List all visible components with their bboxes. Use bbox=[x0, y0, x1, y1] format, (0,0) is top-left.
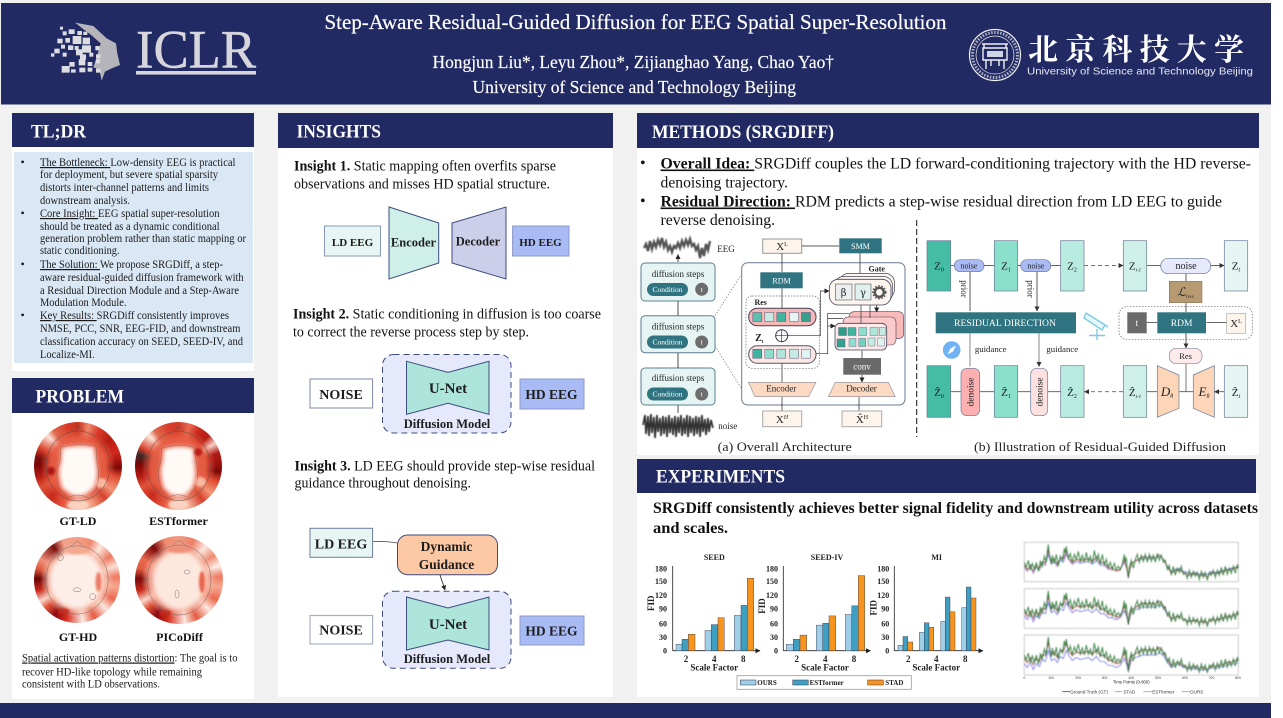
bar chart: SEED-IV: 0 bbox=[774, 646, 778, 656]
diagram: dynamic guidance: Guidance bbox=[419, 557, 474, 572]
bar chart: MI: 30 bbox=[881, 633, 889, 642]
block: diffusion steps stack: Condition bbox=[652, 338, 683, 346]
summary text block: downstream analysis. bbox=[40, 193, 130, 207]
summary text block: The Solution: We propose SRGDiff, a step- bbox=[40, 257, 223, 271]
diagram (b): residual-guided diffusion bbox=[927, 241, 1252, 454]
bar chart legend bbox=[737, 676, 911, 689]
diagram: static conditioning: HD EEG bbox=[525, 387, 578, 402]
key finding text: and scales. bbox=[653, 520, 728, 537]
bar chart: SEED-IV: 90 bbox=[770, 604, 778, 614]
heading: METHODS: METHODS (SRGDIFF) bbox=[652, 122, 834, 143]
block: diffusion steps stack: t bbox=[701, 338, 704, 347]
RDM bbox=[760, 272, 803, 288]
bar chart: MI: 60 bbox=[881, 620, 889, 628]
block: diffusion steps stack: t bbox=[701, 285, 704, 294]
reverse trajectory: denoise bbox=[1036, 377, 1046, 407]
module detail box: Res bbox=[754, 298, 767, 307]
panel: EXPERIMENTS bbox=[637, 459, 1259, 697]
axis labels: 700 bbox=[1209, 676, 1214, 680]
methods bullets: Overall Idea: SRGDiff couples the LD forward-conditioning trajectory with the HD reverse- bbox=[660, 156, 1251, 172]
bar chart: MI: 0 bbox=[885, 646, 889, 656]
RDM block: Res bbox=[1179, 351, 1192, 361]
bar chart: MI: 90 bbox=[881, 604, 889, 614]
module detail box bbox=[742, 238, 905, 427]
bar chart: MI: 180 bbox=[877, 564, 889, 574]
module detail box: X bbox=[776, 241, 784, 253]
bar chart: SEED: 0 bbox=[663, 646, 667, 656]
block: diffusion steps stack: diffusion steps bbox=[652, 322, 705, 332]
bar chart: SEED-IV: 150 bbox=[766, 577, 778, 586]
module detail box: X bbox=[776, 414, 784, 426]
reverse trajectory: Ẑ bbox=[1129, 387, 1136, 399]
forward trajectory: Z bbox=[1001, 260, 1008, 272]
bar chart: SEED: Scale Factor bbox=[690, 662, 738, 672]
authors: Hongjun Liu*, Leyu Zhou*, Zijianghao Yang, Chao Yao† bbox=[432, 52, 834, 72]
diagram: static conditioning: Diffusion Model bbox=[404, 417, 491, 431]
bar chart: SEED: 60 bbox=[659, 620, 667, 628]
axis labels: 100 bbox=[1048, 676, 1054, 680]
prior arrows bbox=[959, 272, 1037, 311]
diagram: static conditioning bbox=[310, 354, 584, 433]
reverse trajectory: t bbox=[1239, 394, 1241, 400]
topomap labels: GT-LD bbox=[60, 514, 97, 528]
module detail box: H bbox=[783, 415, 789, 421]
heading: PROBLEM: PROBLEM bbox=[36, 386, 124, 408]
bar chart: SEED-IV: 30 bbox=[770, 633, 778, 642]
axis labels: Time Points (0-800) bbox=[1113, 680, 1150, 684]
insight 3 text: guidance throughout denoising. bbox=[294, 476, 471, 492]
icon: telescope bbox=[1084, 313, 1108, 340]
forward trajectory: 0 bbox=[941, 268, 944, 274]
insight 1 text: observations and misses HD spatial structure. bbox=[294, 176, 550, 192]
axis labels bbox=[1023, 676, 1241, 684]
block: diffusion steps stack bbox=[641, 254, 715, 413]
forward trajectory: noise bbox=[1028, 262, 1045, 270]
heading: TL;DR: TL;DR bbox=[31, 122, 86, 142]
line chart legend: OURS bbox=[1190, 689, 1203, 694]
forward trajectory: 1 bbox=[1008, 268, 1011, 274]
module detail box: X̂ bbox=[856, 414, 864, 426]
bar chart: SEED-IV: 180 bbox=[766, 564, 778, 574]
summary text block: Modulation Module. bbox=[40, 295, 126, 309]
forward trajectory: t-1 bbox=[1136, 268, 1141, 274]
methods bullets: Residual Direction: RDM predicts a step-wise residual direction from LD EEG to guide bbox=[660, 194, 1222, 210]
bar chart: SEED: 2 bbox=[684, 654, 689, 664]
guidance arrows: guidance bbox=[1046, 344, 1078, 354]
module detail box: γ bbox=[860, 288, 866, 299]
bar chart: MI: 120 bbox=[877, 591, 889, 600]
bar chart: SEED-IV: SEED-IV bbox=[811, 553, 843, 562]
module detail box: RDM bbox=[772, 276, 791, 285]
label: noise: noise bbox=[718, 421, 737, 431]
diagram: static mapping: HD EEG bbox=[519, 237, 562, 249]
input XL bbox=[763, 239, 802, 253]
key finding text bbox=[653, 500, 1258, 537]
diagram: dynamic guidance: Dynamic bbox=[421, 539, 472, 554]
heading: EXPERIMENTS: EXPERIMENTS bbox=[656, 466, 785, 488]
forward trajectory: Z bbox=[934, 260, 941, 272]
RDM block: X bbox=[1230, 318, 1238, 330]
reverse trajectory: Ẑ bbox=[1001, 387, 1008, 399]
summary text block: Core Insight: EEG spatial super-resolution bbox=[40, 206, 220, 220]
module detail box: Z bbox=[755, 333, 762, 344]
bar chart legend: ESTformer bbox=[810, 679, 844, 687]
divider bbox=[916, 220, 918, 437]
forward trajectory: noise bbox=[1175, 261, 1197, 272]
reverse trajectory: 0 bbox=[941, 394, 944, 400]
summary text block: for deployment, but severe spatial sparsity bbox=[40, 167, 218, 181]
diagram: static mapping bbox=[324, 207, 569, 279]
icon: compass bbox=[943, 341, 960, 359]
reverse trajectory: θ bbox=[1206, 394, 1210, 400]
forward trajectory bbox=[927, 241, 1248, 291]
problem caption bbox=[22, 650, 238, 690]
insight 2 text bbox=[293, 306, 601, 340]
insight 2 text: to correct the reverse process step by step. bbox=[293, 324, 529, 340]
insight 1 text bbox=[294, 158, 556, 192]
diagram (a): overall architecture bbox=[641, 238, 905, 454]
prior arrows: prior bbox=[1026, 280, 1036, 298]
diagram: dynamic guidance: LD EEG bbox=[315, 538, 367, 552]
axis labels: 200 bbox=[1075, 676, 1081, 680]
icon: EEG wave bbox=[644, 238, 710, 258]
caption (a): (a) Overall Architecture bbox=[718, 439, 852, 454]
summary text block: NMSE, PCC, SNR, EEG-FID, and downstream bbox=[40, 321, 241, 335]
module detail box: Encoder bbox=[766, 384, 796, 394]
bar chart: SEED bbox=[646, 553, 760, 672]
bar chart: SEED: SEED bbox=[704, 553, 725, 562]
logo: USTB wordmark: University of Science and Technology Beijing bbox=[1027, 66, 1253, 78]
bar chart: SEED-IV: Scale Factor bbox=[801, 662, 849, 672]
methods bullets: • bbox=[640, 193, 646, 210]
summary text block: generation problem rather than static mapping or bbox=[40, 231, 246, 245]
insight 1 text: Insight 1. Static mapping often overfits sparse bbox=[294, 158, 556, 174]
RDM block: res bbox=[1186, 294, 1194, 300]
summary text block: Localize-MI. bbox=[40, 347, 95, 361]
diagram: dynamic guidance: NOISE bbox=[319, 624, 363, 638]
module detail box: t bbox=[762, 340, 764, 345]
encoder / decoder bbox=[748, 382, 816, 397]
bar chart: SEED: 150 bbox=[655, 577, 667, 586]
logo: ICLR bbox=[51, 20, 256, 81]
block: diffusion steps stack: Condition bbox=[652, 285, 683, 294]
summary text block: • bbox=[20, 257, 25, 271]
prior arrows: prior bbox=[959, 280, 969, 298]
bar chart: SEED-IV: 4 bbox=[823, 654, 828, 664]
block: diffusion steps stack: Condition bbox=[652, 390, 683, 398]
line chart legend: STAD bbox=[1123, 689, 1136, 694]
caption (b): (b) Illustration of Residual-Guided Diffusion bbox=[974, 439, 1227, 454]
problem caption: Spatial activation patterns distortion: The goal is to bbox=[22, 650, 238, 664]
guidance arrows bbox=[970, 333, 1078, 366]
bar chart: SEED: FID bbox=[646, 595, 656, 611]
summary text block bbox=[14, 152, 253, 363]
axis labels: 300 bbox=[1102, 676, 1107, 680]
summary text block: classification accuracy on SEED, SEED-IV, and bbox=[40, 334, 243, 348]
RDM block: L bbox=[1238, 319, 1242, 325]
diagram: static mapping: Decoder bbox=[456, 234, 501, 248]
bar chart: MI bbox=[868, 553, 983, 672]
axis labels: 0 bbox=[1023, 676, 1025, 680]
line chart legend: Ground Truth (GT) bbox=[1070, 689, 1108, 694]
bar chart: MI: FID bbox=[868, 599, 878, 615]
reverse trajectory: Ẑ bbox=[1232, 387, 1239, 399]
methods bullets: • bbox=[640, 155, 646, 172]
panel: METHODS bbox=[637, 113, 1259, 455]
summary text block: should be treated as a dynamic conditional bbox=[40, 219, 220, 233]
module detail box: SMM bbox=[851, 242, 870, 251]
bar chart: MI: MI bbox=[931, 553, 942, 562]
bar chart: SEED-IV bbox=[757, 553, 870, 672]
axis labels: 600 bbox=[1182, 676, 1188, 680]
problem caption: recover HD-like topology while remaining bbox=[22, 664, 202, 678]
topomap labels: PICoDiff bbox=[156, 630, 204, 644]
forward trajectory: 2 bbox=[1074, 268, 1077, 274]
summary text block: The Bottleneck: Low-density EEG is practical bbox=[40, 155, 236, 169]
bar chart: SEED: 30 bbox=[659, 633, 667, 642]
residual direction bar bbox=[936, 312, 1076, 333]
bar chart: MI: 8 bbox=[963, 654, 968, 664]
bar chart: SEED-IV: 60 bbox=[770, 620, 778, 628]
RDM block: t bbox=[1136, 319, 1139, 329]
bar chart legend: OURS bbox=[757, 679, 777, 687]
label: EEG: EEG bbox=[717, 244, 735, 254]
icon: noise wave bbox=[643, 414, 713, 438]
reverse trajectory: θ bbox=[1170, 394, 1173, 400]
forward trajectory: Z bbox=[1067, 260, 1074, 272]
footer bar bbox=[0, 703, 1271, 718]
reverse trajectory: 1 bbox=[1008, 394, 1011, 400]
bar chart: SEED: 90 bbox=[659, 604, 667, 614]
SMM bbox=[839, 238, 882, 253]
block: diffusion steps stack: t bbox=[701, 390, 704, 399]
heading: INSIGHTS: INSIGHTS bbox=[296, 122, 381, 142]
module detail box: L bbox=[784, 242, 788, 248]
RDM block: ℒ bbox=[1177, 285, 1186, 299]
residual direction bar: RESIDUAL DIRECTION bbox=[954, 319, 1056, 329]
topomap: PICoDiff bbox=[135, 536, 223, 624]
bar chart: SEED-IV: 120 bbox=[766, 591, 778, 600]
feature maps bbox=[849, 312, 904, 339]
insight 3 text: Insight 3. LD EEG should provide step-wise residual bbox=[294, 458, 595, 474]
forward trajectory: Z bbox=[1232, 260, 1239, 272]
reverse trajectory: D bbox=[1161, 384, 1170, 399]
summary text block: static conditioning. bbox=[40, 243, 120, 257]
methods bullets: reverse denoising. bbox=[660, 212, 775, 229]
axis labels: 400 bbox=[1128, 676, 1134, 680]
key finding text: SRGDiff consistently achieves better signal fidelity and downstream utility across datasets bbox=[653, 500, 1258, 517]
bar chart: MI: Scale Factor bbox=[912, 662, 960, 672]
logo: USTB seal bbox=[970, 30, 1020, 80]
block: diffusion steps stack: diffusion steps bbox=[652, 269, 705, 279]
methods bullets: denoising trajectory. bbox=[660, 174, 788, 192]
insight 3 text bbox=[294, 458, 595, 492]
gate: Gate bbox=[868, 264, 885, 274]
bar chart: SEED-IV: 2 bbox=[794, 654, 799, 664]
line chart legend bbox=[1062, 689, 1203, 694]
block: diffusion steps stack: diffusion steps bbox=[652, 373, 705, 383]
reverse trajectory: t-1 bbox=[1136, 395, 1141, 400]
diagram: static conditioning: U-Net bbox=[429, 381, 467, 397]
summary text block: • bbox=[20, 206, 25, 220]
affiliation: University of Science and Technology Beijing bbox=[472, 77, 796, 97]
RDM block: RDM bbox=[1171, 319, 1193, 329]
module detail box: β bbox=[841, 288, 847, 299]
bar chart: SEED-IV: FID bbox=[757, 598, 767, 614]
panel: PROBLEM bbox=[12, 378, 254, 699]
bar chart: SEED: 4 bbox=[712, 654, 717, 664]
line chart legend: ESTformer bbox=[1152, 689, 1175, 694]
insight 2 text: Insight 2. Static conditioning in diffusion is too coarse bbox=[293, 306, 601, 322]
diagram: static mapping: LD EEG bbox=[332, 237, 374, 249]
methods bullets bbox=[640, 155, 1251, 229]
forward trajectory: Z bbox=[1129, 260, 1136, 272]
dotted zoom lines bbox=[715, 275, 741, 388]
summary text block: • bbox=[20, 155, 25, 169]
forward trajectory: t bbox=[1239, 268, 1241, 274]
module detail box: H bbox=[864, 415, 869, 421]
input / output bbox=[763, 411, 802, 427]
diagram: static mapping: Encoder bbox=[391, 236, 437, 250]
summary text block: aware residual-guided diffusion framework with bbox=[40, 270, 244, 284]
topomap: GT-HD bbox=[34, 537, 120, 623]
topomap labels: GT-HD bbox=[59, 630, 97, 644]
bar chart: SEED: 180 bbox=[655, 564, 667, 574]
residual group bbox=[746, 296, 819, 368]
guidance arrows: guidance bbox=[975, 344, 1007, 354]
logo: USTB wordmark: 北京科技大学 bbox=[1028, 25, 1253, 69]
RDM block bbox=[1119, 274, 1252, 364]
axis labels: 500 bbox=[1155, 676, 1161, 680]
panel: INSIGHTS bbox=[278, 113, 613, 697]
topomap: ESTformer bbox=[134, 422, 222, 510]
reverse trajectory: 2 bbox=[1074, 394, 1077, 400]
bar chart: SEED: 120 bbox=[655, 591, 667, 600]
reverse trajectory: Ẑ bbox=[1067, 387, 1074, 399]
module detail box: conv bbox=[853, 362, 871, 372]
summary text block: • bbox=[20, 308, 25, 322]
logo: ICLR: ICLR bbox=[136, 20, 256, 80]
diagram: dynamic guidance: U-Net bbox=[429, 617, 467, 633]
summary text block: Key Results: SRGDiff consistently improves bbox=[40, 308, 229, 322]
forward trajectory: noise bbox=[961, 262, 978, 270]
summary text block: a Residual Direction Module and a Step-Aware bbox=[40, 283, 239, 297]
bar chart: MI: 2 bbox=[906, 654, 911, 664]
bar chart: MI: 4 bbox=[934, 654, 939, 664]
summary text block: distorts inter-channel patterns and limits bbox=[40, 180, 209, 194]
reverse trajectory bbox=[927, 364, 1248, 417]
problem caption: consistent with LD observations. bbox=[22, 676, 160, 690]
diagram: static conditioning: NOISE bbox=[319, 388, 363, 403]
module detail box: Decoder bbox=[846, 384, 877, 394]
reverse trajectory: denoise bbox=[966, 377, 976, 407]
bar chart legend: STAD bbox=[885, 679, 903, 687]
topomap labels: ESTformer bbox=[149, 514, 208, 528]
axis labels: 800 bbox=[1235, 676, 1241, 680]
title: Step-Aware Residual-Guided Diffusion for EEG Spatial Super-Resolution bbox=[324, 10, 947, 34]
bar chart: MI: 150 bbox=[877, 577, 889, 586]
panel: TL;DR bbox=[12, 113, 254, 371]
topomap labels bbox=[59, 514, 208, 644]
bar chart: SEED: 8 bbox=[741, 654, 746, 664]
diagram: dynamic guidance: Diffusion Model bbox=[404, 652, 491, 666]
diagram: dynamic guidance: HD EEG bbox=[525, 624, 578, 638]
header banner bbox=[1, 3, 1271, 104]
diagram: dynamic guidance bbox=[310, 528, 584, 668]
reverse trajectory: E bbox=[1199, 384, 1206, 399]
topomap: GT-LD bbox=[34, 422, 122, 510]
conv bbox=[843, 358, 881, 375]
bar chart: SEED-IV: 8 bbox=[852, 654, 857, 664]
reverse trajectory: Ẑ bbox=[934, 387, 941, 399]
line chart: signal reconstruction, three stacked plots bbox=[1023, 542, 1241, 694]
